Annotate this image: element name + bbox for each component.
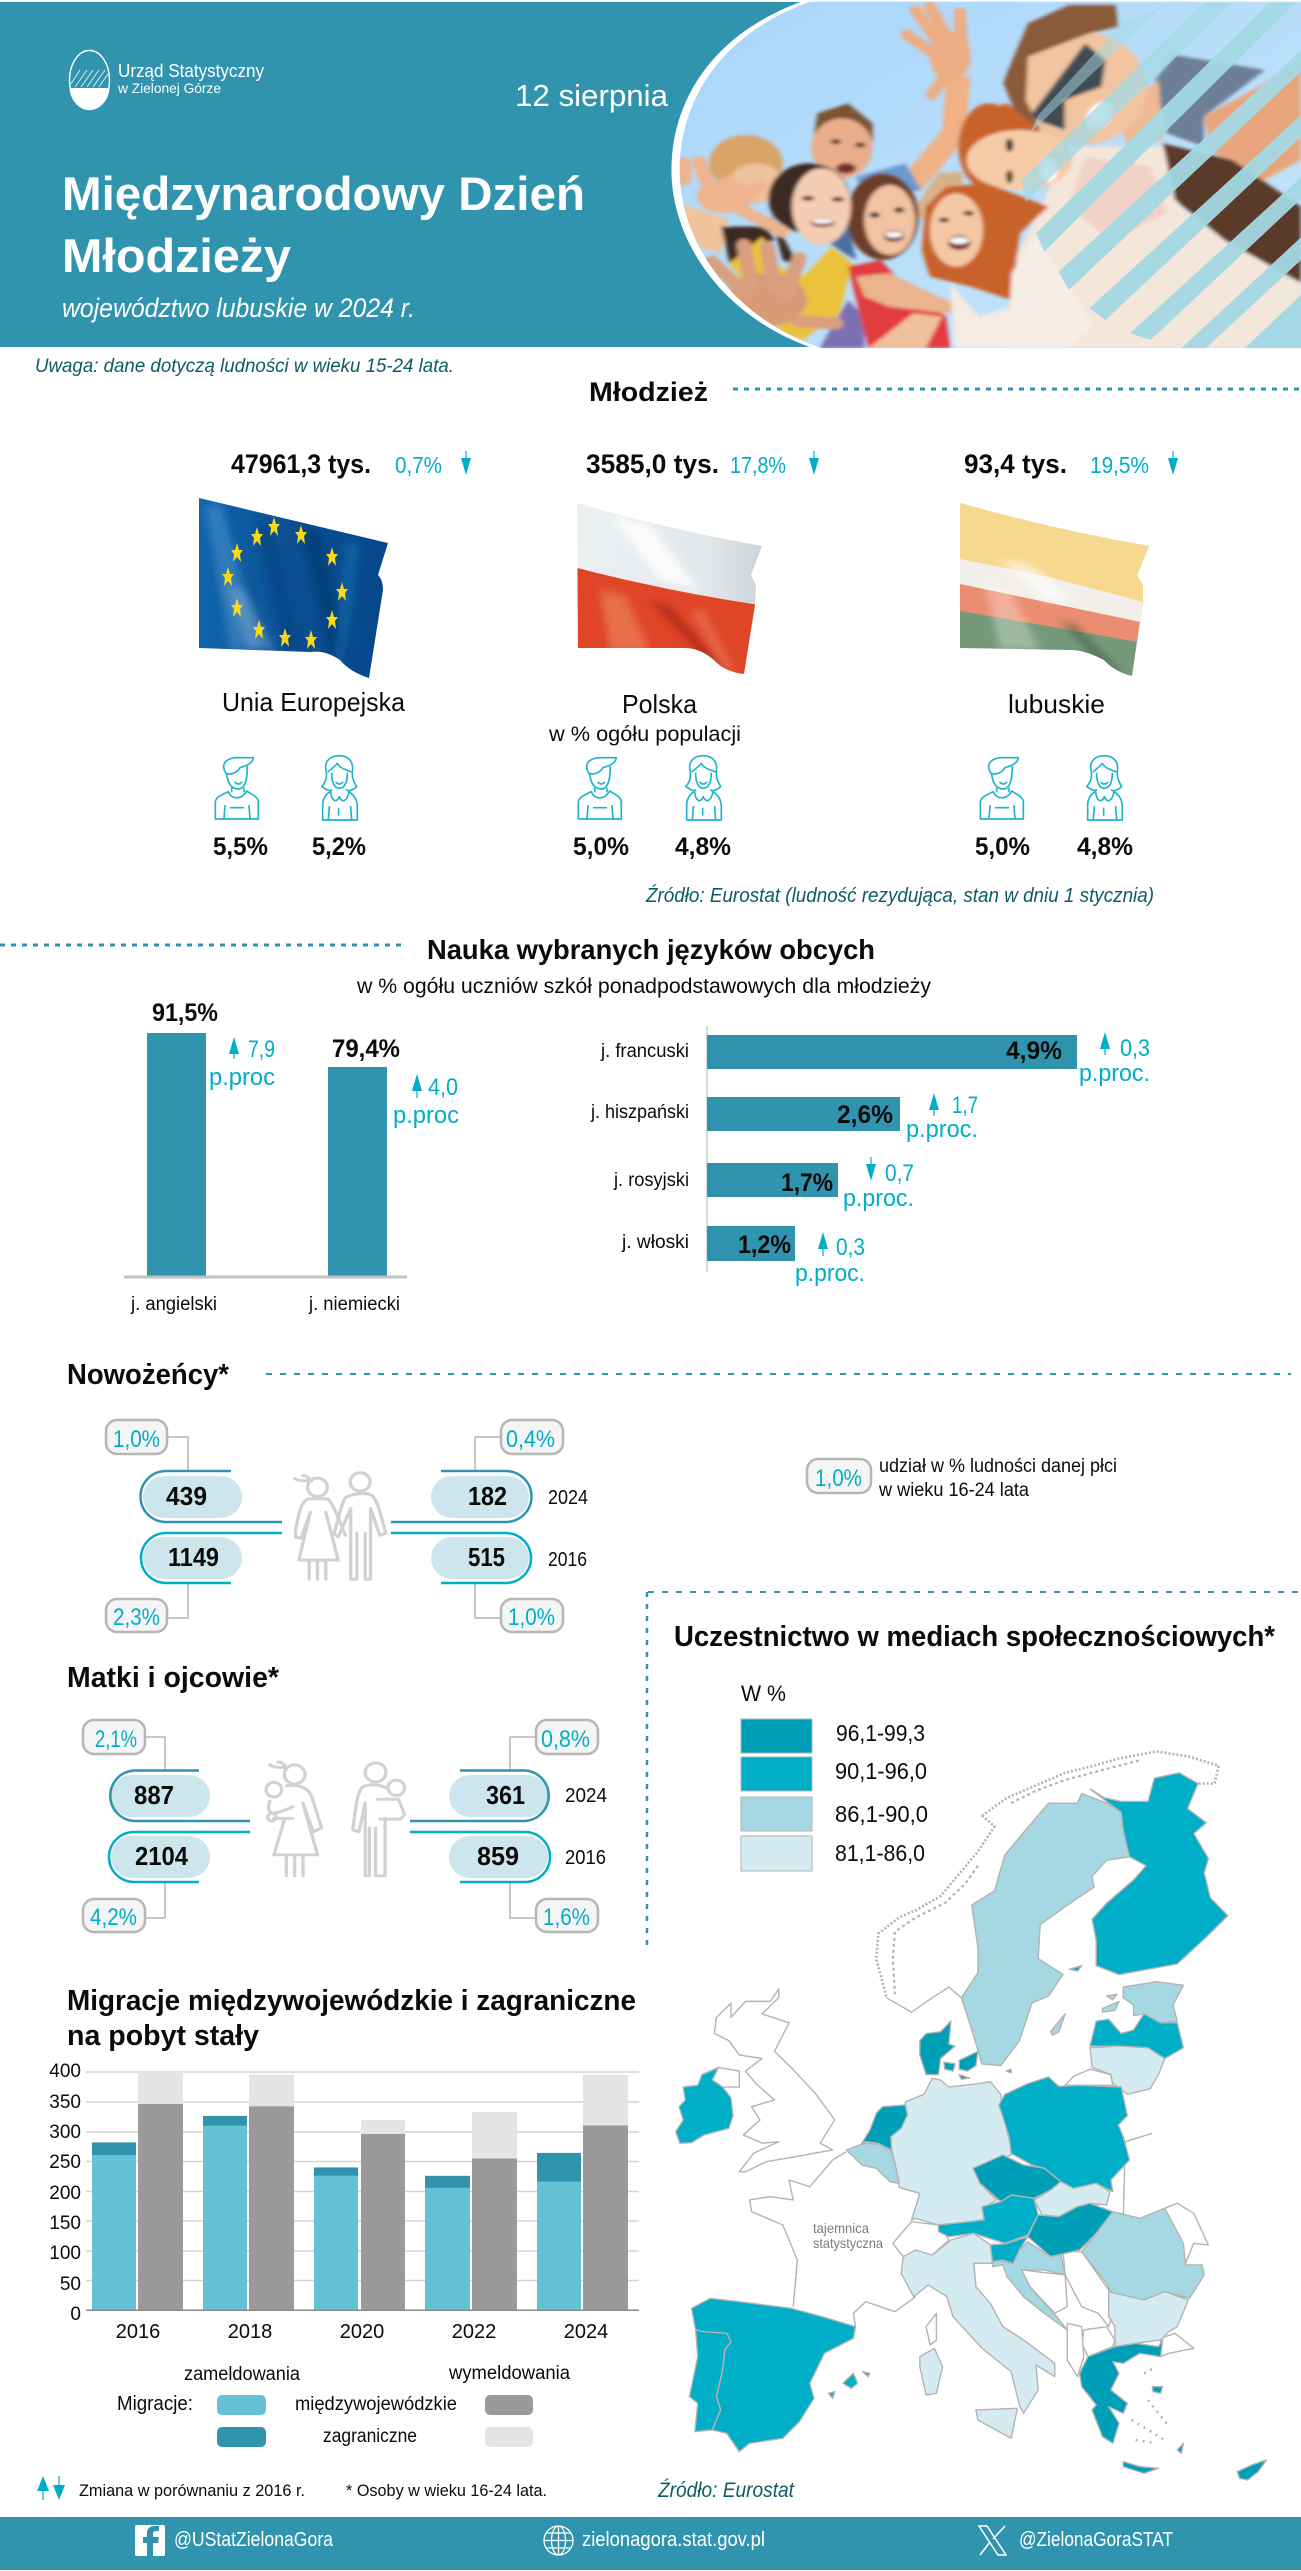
- icon: man: [980, 758, 1023, 819]
- legend note: w wieku 16-24 lata: [878, 1480, 1029, 1501]
- pill: left 2024: 439: [166, 1481, 207, 1511]
- footnotes: [37, 2476, 547, 2500]
- chart: other languages: [590, 1026, 1150, 1287]
- legend note: udział w % ludności danej płci: [879, 1456, 1117, 1477]
- pill: right 2016: 515: [468, 1542, 505, 1572]
- panel: mothers and fathers: 2024: [565, 1785, 607, 1807]
- legend: migration: zagraniczne: [323, 2426, 417, 2447]
- pill: fathers 2016: 859: [477, 1841, 519, 1871]
- panel: youth population: [195, 449, 1178, 861]
- icon: mother with child: [266, 1762, 322, 1876]
- legend: migration: zameldowania: [184, 2364, 300, 2385]
- note: Uwaga: dane dotyczą ludności w wieku 15-24 lata.: [35, 356, 454, 377]
- heading: migration: [67, 1985, 636, 2052]
- title: [62, 167, 585, 282]
- chart: English and German: j. niemiecki: [308, 1294, 400, 1315]
- callout: 1,6%: 1,6%: [543, 1904, 590, 1931]
- chart: other languages: p.proc.: [906, 1116, 978, 1143]
- column: Unia Europejska: 5,5%: [213, 833, 268, 861]
- column: lubuskie: 19,5%: [1090, 452, 1149, 478]
- chart: migration: 2024: [564, 2321, 608, 2343]
- map legend: 90,1-96,0: [835, 1758, 927, 1784]
- chart: migration: 2016: [116, 2321, 160, 2343]
- heading: languages: Nauka wybranych języków obcych: [427, 934, 875, 965]
- chart: other languages: 1,7%: [781, 1169, 833, 1197]
- arrow up: [1100, 1032, 1110, 1055]
- column: lubuskie: [955, 449, 1178, 861]
- map legend: 86,1-90,0: [835, 1801, 928, 1827]
- panel: mothers and fathers: 2016: [565, 1847, 606, 1869]
- title: Międzynarodowy Dzień: [62, 167, 585, 220]
- chart: migration: 350: [49, 2092, 81, 2113]
- icon: globe: [544, 2526, 573, 2555]
- chart: other languages: j. hiszpański: [590, 1102, 689, 1123]
- heading: social media: Uczestnictwo w mediach społecznościowych*: [674, 1621, 1276, 1653]
- chart: English and German: p.proc: [393, 1102, 459, 1129]
- column: Polska: Polska: [622, 689, 698, 719]
- legend note: 1,0%: [815, 1465, 862, 1492]
- arrow down: [461, 451, 471, 475]
- chart: migration: 2022: [452, 2321, 496, 2343]
- chart: English and German: j. angielski: [130, 1294, 217, 1315]
- icon: woman: [322, 756, 357, 820]
- column: lubuskie: 93,4 tys.: [964, 449, 1067, 479]
- column: lubuskie: 5,0%: [975, 833, 1030, 861]
- icon: couple: [295, 1473, 386, 1579]
- flag: Poland: [577, 503, 762, 674]
- footer: @UStatZielonaGora: [174, 2529, 334, 2551]
- callout: 2,1%: 2,1%: [95, 1726, 137, 1753]
- map of Europe: [676, 1751, 1266, 2480]
- chart: other languages: 1,7: [952, 1092, 978, 1119]
- map note: confidential data: [813, 2220, 883, 2251]
- chart: English and German: [124, 999, 459, 1315]
- icon: man: [578, 758, 621, 819]
- map legend: 96,1-99,3: [836, 1720, 925, 1746]
- chart: migration: 0: [70, 2304, 81, 2325]
- column: lubuskie: lubuskie: [1008, 689, 1105, 719]
- map note: confidential data: tajemnica: [813, 2220, 869, 2236]
- chart: other languages: p.proc.: [795, 1260, 865, 1287]
- column: lubuskie: 4,8%: [1077, 833, 1133, 861]
- callout: 2,3%: 2,3%: [113, 1604, 160, 1631]
- footer: [0, 2517, 1301, 2570]
- pill: mothers 2016: [109, 1832, 250, 1882]
- icon: woman: [686, 756, 721, 820]
- chart: English and German: p.proc: [209, 1064, 275, 1091]
- logo: Urząd Statystyczny w Zielonej Górze: Urząd Statystyczny: [118, 61, 264, 81]
- chart: other languages: p.proc.: [843, 1185, 914, 1212]
- callout: 1,0%: [106, 1420, 167, 1454]
- callout: 0,8%: 0,8%: [541, 1726, 590, 1753]
- logo: Urząd Statystyczny w Zielonej Górze: [70, 50, 264, 110]
- date: 12 sierpnia: [515, 78, 669, 113]
- callout: 1,0%: 1,0%: [113, 1426, 160, 1453]
- chart: English and German: 4,0: [428, 1074, 458, 1101]
- column: Unia Europejska: 47961,3 tys.: [231, 449, 371, 479]
- footer: @ZielonaGoraSTAT: [1019, 2529, 1173, 2551]
- icon: X: [979, 2526, 1006, 2555]
- map: northern Europe: [702, 1751, 1228, 2172]
- pill: mothers 2016: 2104: [135, 1841, 188, 1871]
- chart: migration: 50: [60, 2274, 81, 2295]
- legend note: [807, 1456, 1117, 1501]
- callout: 2,1%: [83, 1720, 145, 1754]
- footer: zielonagora.stat.gov.pl: [582, 2529, 765, 2551]
- icon: father with child: [353, 1763, 405, 1876]
- header banner: [0, 0, 1301, 350]
- column: Polska: 4,8%: [675, 833, 731, 861]
- pill: left 2024: [141, 1471, 282, 1522]
- photo: group of young people: [660, 0, 1301, 350]
- chart: other languages: j. rosyjski: [613, 1170, 689, 1191]
- column: Polska: w % ogółu populacji: [548, 723, 741, 746]
- chart: migration: [49, 2061, 639, 2343]
- pill: right 2024: [391, 1471, 532, 1522]
- chart: other languages: 4,9%: [1006, 1037, 1062, 1065]
- map legend: [741, 1681, 928, 1871]
- map note: confidential data: statystyczna: [813, 2235, 883, 2251]
- arrow up: [229, 1037, 239, 1059]
- arrow down: [866, 1157, 876, 1181]
- icon: facebook: [135, 2525, 165, 2556]
- column: Unia Europejska: [195, 449, 471, 861]
- callout: 0,4%: 0,4%: [506, 1426, 555, 1453]
- panel: newlyweds: 2024: [548, 1487, 588, 1509]
- chart: other languages: 1,2%: [738, 1231, 791, 1259]
- callout: 4,2%: 4,2%: [90, 1904, 137, 1931]
- chart: migration: 2018: [228, 2321, 272, 2343]
- heading: mothers and fathers: Matki i ojcowie*: [67, 1662, 280, 1694]
- subtitle: województwo lubuskie w 2024 r.: [62, 293, 415, 323]
- column: Unia Europejska: 0,7%: [395, 452, 442, 478]
- facial details: [810, 163, 971, 250]
- pill: fathers 2016: [410, 1832, 550, 1882]
- arrow down: [1168, 451, 1178, 475]
- logo: Urząd Statystyczny w Zielonej Górze: w Zielonej Górze: [117, 80, 221, 96]
- arrow up: [818, 1232, 828, 1256]
- map: central and southern Europe: [676, 2068, 1266, 2480]
- pill: right 2016: [391, 1533, 531, 1583]
- chart: other languages: j. francuski: [600, 1041, 689, 1062]
- chart: other languages: 2,6%: [837, 1101, 893, 1129]
- column: Polska: 3585,0 tys.: [586, 449, 719, 479]
- pill: fathers 2024: 361: [486, 1780, 525, 1810]
- pill: mothers 2024: [110, 1770, 250, 1821]
- panel: mothers and fathers: [83, 1720, 607, 1932]
- arrow up: [929, 1093, 939, 1116]
- column: Unia Europejska: 5,2%: [312, 833, 366, 861]
- heading: Młodzież: Młodzież: [589, 377, 708, 407]
- chart: migration: 2020: [340, 2321, 384, 2343]
- icon: man: [215, 758, 258, 819]
- pill: mothers 2024: 887: [134, 1780, 174, 1810]
- column: Polska: [548, 449, 819, 861]
- panel: newlyweds: [106, 1420, 588, 1632]
- pill: left 2016: [141, 1533, 282, 1583]
- chart: English and German: 79,4%: [332, 1035, 400, 1063]
- source: map: Źródło: Eurostat: [657, 2479, 795, 2502]
- heading: migration: Migracje międzywojewódzkie i zagraniczne: [67, 1985, 636, 2017]
- column: Unia Europejska: Unia Europejska: [222, 687, 406, 717]
- chart: other languages: p.proc.: [1079, 1060, 1150, 1087]
- footnotes: * Osoby w wieku 16-24 lata.: [346, 2481, 547, 2500]
- chart: migration: 250: [49, 2152, 81, 2173]
- icon: woman: [1087, 756, 1122, 820]
- icon: up and down arrows: [37, 2476, 65, 2500]
- chart: other languages: j. włoski: [621, 1232, 689, 1253]
- chart: migration: 100: [49, 2243, 81, 2264]
- chart: migration: 300: [49, 2122, 81, 2143]
- chart: migration: 400: [49, 2061, 81, 2082]
- flag: lubuskie: [955, 500, 1155, 680]
- callout: 1,0%: 1,0%: [508, 1604, 555, 1631]
- pill: left 2016: 1149: [168, 1542, 219, 1572]
- heading: newlyweds: Nowożeńcy*: [67, 1359, 230, 1391]
- subheading: languages: w % ogółu uczniów szkół ponadpodstawowych dla młodzieży: [356, 975, 931, 998]
- map legend: W %: [741, 1681, 786, 1706]
- footnotes: Zmiana w porównaniu z 2016 r.: [79, 2481, 305, 2500]
- arrow up: [412, 1074, 422, 1098]
- chart: English and German: 7,9: [248, 1036, 275, 1063]
- arrow down: [809, 451, 819, 475]
- source: youth: Źródło: Eurostat (ludność rezydująca, stan w dniu 1 stycznia): [645, 884, 1154, 907]
- chart: other languages: 0,7: [885, 1160, 914, 1187]
- chart: other languages: 0,3: [836, 1234, 865, 1261]
- chart: other languages: 0,3: [1120, 1035, 1150, 1062]
- pill: fathers 2024: [410, 1770, 549, 1821]
- heading: migration: na pobyt stały: [67, 2020, 259, 2052]
- flag: EU: [195, 495, 390, 680]
- legend: migration: [117, 2363, 570, 2447]
- pill: right 2024: 182: [468, 1481, 507, 1511]
- column: Polska: 17,8%: [730, 452, 786, 478]
- column: Polska: 5,0%: [573, 833, 629, 861]
- chart: migration: 200: [49, 2183, 81, 2204]
- title: Młodzieży: [62, 229, 291, 282]
- legend: migration: wymeldowania: [448, 2363, 570, 2384]
- legend: migration: Migracje:: [117, 2393, 193, 2415]
- legend: migration: międzywojewódzkie: [295, 2394, 457, 2415]
- chart: English and German: 91,5%: [152, 999, 218, 1027]
- chart: migration: 150: [49, 2213, 81, 2234]
- panel: newlyweds: 2016: [548, 1549, 587, 1571]
- map legend: 81,1-86,0: [835, 1840, 925, 1866]
